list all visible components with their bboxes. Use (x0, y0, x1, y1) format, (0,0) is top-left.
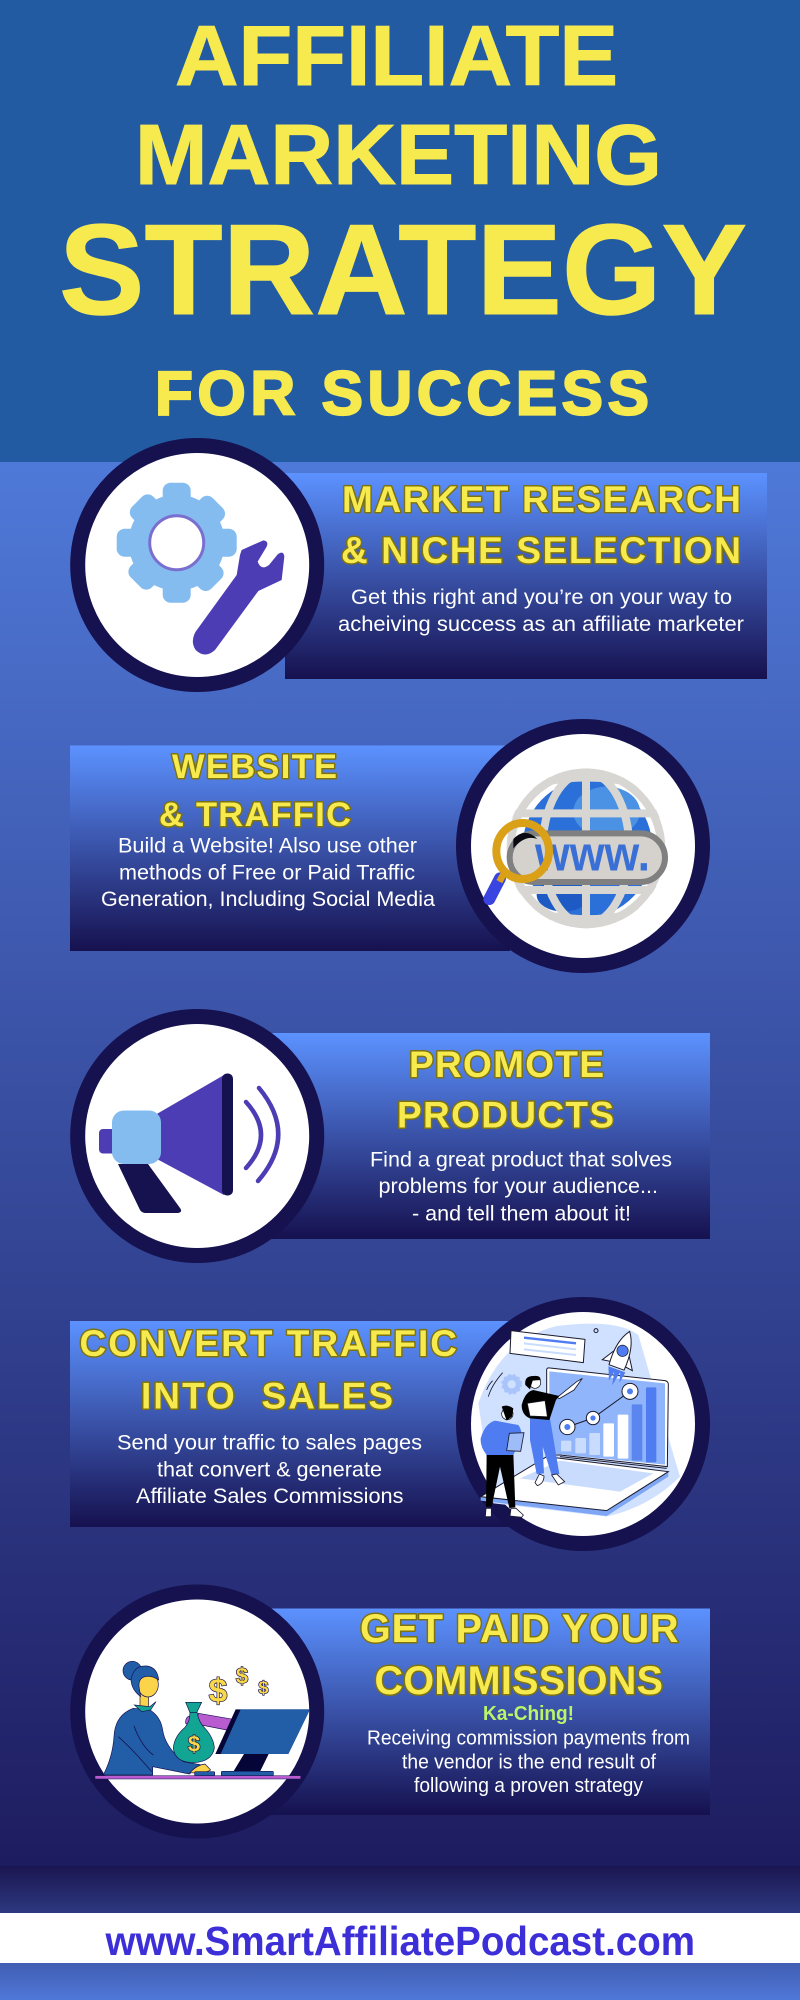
icon: team with sales chart on laptop (478, 1324, 680, 1517)
heading 2 line 2: & TRAFFIC (159, 796, 351, 834)
icon: megaphone (99, 1074, 278, 1213)
body 2: Build a Website! Also use other (118, 834, 417, 858)
body 3: problems for your audience... (378, 1174, 658, 1198)
footer url band (0, 1913, 800, 1964)
icon: woman receiving money bag (95, 1661, 310, 1779)
body 3: - and tell them about it! (412, 1202, 631, 1226)
body 2 (101, 834, 435, 911)
body 5: following a proven strategy (414, 1774, 644, 1797)
body 5 (367, 1726, 690, 1797)
body 2: Generation, Including Social Media (101, 887, 435, 911)
body 2: methods of Free or Paid Traffic (119, 860, 415, 884)
title line: for success: FOR SUCCESS (155, 360, 649, 428)
heading 5 line 1: GET PAID YOUR (360, 1607, 678, 1651)
icon: woman receiving money bag: $ (188, 1731, 200, 1756)
icon: woman receiving money bag: $ (258, 1677, 268, 1697)
body 4: Send your traffic to sales pages (117, 1430, 422, 1454)
body 1: Get this right and you’re on your way to (351, 585, 732, 609)
panel 5 background (270, 1608, 710, 1815)
heading 4 line 1: CONVERT TRAFFIC (80, 1323, 457, 1364)
panel 3 circle (78, 1016, 317, 1256)
icon: woman receiving money bag: $ (236, 1663, 248, 1688)
heading 3 line 2: PRODUCTS (397, 1094, 614, 1136)
panel 4 background (70, 1321, 510, 1527)
heading 3 line 1: PROMOTE (409, 1044, 604, 1085)
background gradient (0, 462, 800, 1866)
heading 5 line 2: COMMISSIONS (374, 1659, 663, 1703)
body 4 (117, 1430, 422, 1508)
panel 2 circle (464, 726, 702, 966)
panel 5 circle (78, 1592, 317, 1831)
body 4: that convert & generate (157, 1458, 382, 1482)
icon: woman receiving money bag: $ (209, 1673, 228, 1710)
header panel (0, 0, 800, 462)
panel 4 circle (464, 1304, 702, 1544)
icon: gear and wrench (117, 483, 284, 654)
panel: market research (78, 446, 767, 684)
body 1 (338, 585, 744, 636)
panel 1 background (285, 473, 767, 679)
title line: strategy: STRATEGY (59, 198, 747, 342)
icon: www globe (489, 768, 665, 928)
website url: www.SmartAffiliatePodcast.com (105, 1918, 695, 1964)
body 4: Affiliate Sales Commissions (136, 1484, 404, 1508)
heading 1 line 2: & NICHE SELECTION (341, 530, 741, 571)
highlight: ka-ching: Ka-Ching! (483, 1703, 574, 1725)
panel: get paid your commissions (78, 1592, 710, 1831)
body 5: Receiving commission payments from (367, 1726, 690, 1750)
heading 1 line 1: MARKET RESEARCH (342, 479, 741, 520)
title line: marketing: MARKETING (135, 108, 662, 203)
panel 1 circle (78, 446, 317, 684)
body 1: acheiving success as an affiliate marketer (338, 612, 744, 636)
panel 2 background (70, 746, 510, 951)
heading 2 line 1: WEBSITE (172, 748, 337, 786)
title line: affiliate: AFFILIATE (175, 9, 618, 104)
body 3: Find a great product that solves (370, 1148, 672, 1172)
panel: website and traffic (70, 726, 702, 966)
icon: www globe: www. (534, 827, 650, 882)
panel 3 background (270, 1033, 710, 1239)
heading 4 line 2: INTO SALES (141, 1376, 393, 1416)
bottom gradient band (0, 1866, 800, 2000)
body 3 (370, 1148, 672, 1226)
panel: convert traffic into sales (70, 1304, 702, 1544)
panel: promote products (78, 1016, 710, 1256)
body 5: the vendor is the end result of (402, 1750, 656, 1774)
